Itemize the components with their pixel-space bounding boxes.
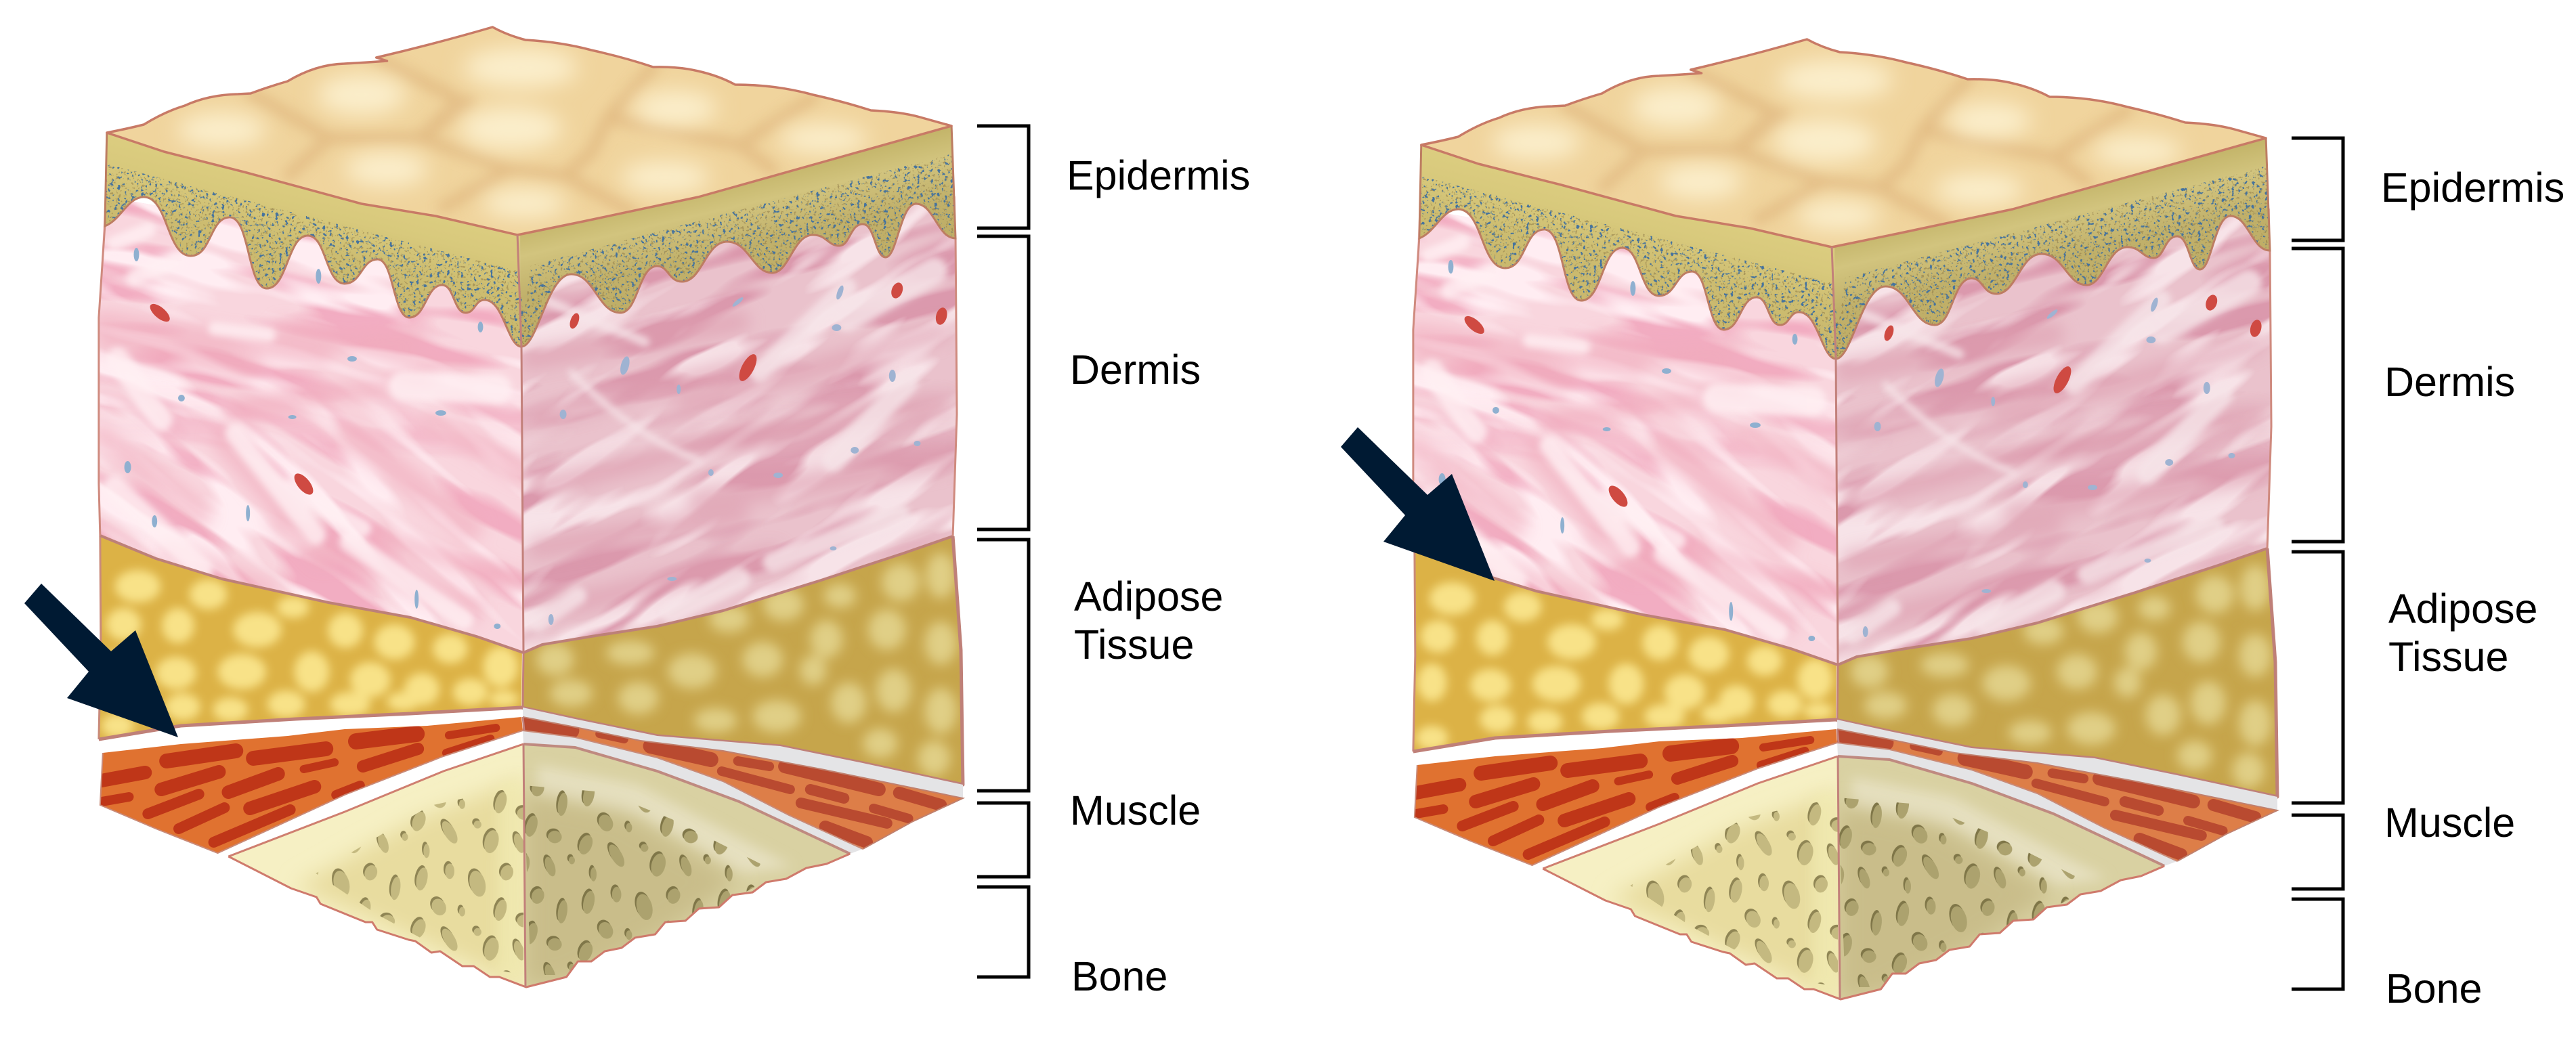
- central corner edge: [1832, 247, 1840, 999]
- gap between adipose and muscle: [1837, 720, 2277, 866]
- layer labels: Tissue: [1074, 622, 1194, 668]
- bone layer: [1536, 750, 2174, 1004]
- top skin surface: [1415, 32, 2275, 256]
- layer labels: Muscle: [2384, 800, 2515, 846]
- skin cube illustration, right: [1246, 0, 2424, 1004]
- layer labels: Dermis: [1070, 347, 1201, 393]
- layer labels: Epidermis: [2381, 165, 2564, 211]
- layer labels: Adipose: [1074, 573, 1223, 619]
- layer labels: Bone: [1071, 953, 1167, 999]
- muscle layer: [1409, 723, 2282, 869]
- layer labels: Adipose: [2388, 586, 2537, 632]
- layer labels: [2381, 165, 2564, 1012]
- adipose tissue layer: [94, 528, 968, 792]
- layer labels: Bone: [2386, 965, 2482, 1012]
- top skin surface: [101, 20, 961, 244]
- gap between adipose and muscle: [523, 708, 963, 854]
- central corner edge: [517, 235, 525, 987]
- layer labels: Tissue: [2388, 634, 2508, 680]
- epidermis layer: [1409, 134, 2278, 371]
- epidermis layer: [94, 122, 964, 359]
- dermis layer: [1246, 0, 2424, 934]
- dermis layer: [0, 0, 1109, 921]
- muscle layer: [94, 711, 968, 856]
- panel: left skin block: [0, 0, 1250, 999]
- bone layer: [221, 738, 859, 992]
- layer labels: Dermis: [2384, 359, 2515, 405]
- arrow pointing at dermis-adipose boundary: [1341, 427, 1495, 581]
- layer brackets: [977, 126, 1029, 977]
- adipose tissue layer: [1409, 540, 2282, 804]
- skin cube illustration, left: [43, 26, 965, 988]
- layer labels: Epidermis: [1067, 152, 1250, 198]
- layer labels: Muscle: [1070, 787, 1201, 833]
- panel: right skin block: [1246, 0, 2564, 1012]
- arrow pointing at adipose-muscle separation: [24, 584, 178, 737]
- layer brackets: [2292, 138, 2343, 989]
- layer labels: [1067, 152, 1250, 999]
